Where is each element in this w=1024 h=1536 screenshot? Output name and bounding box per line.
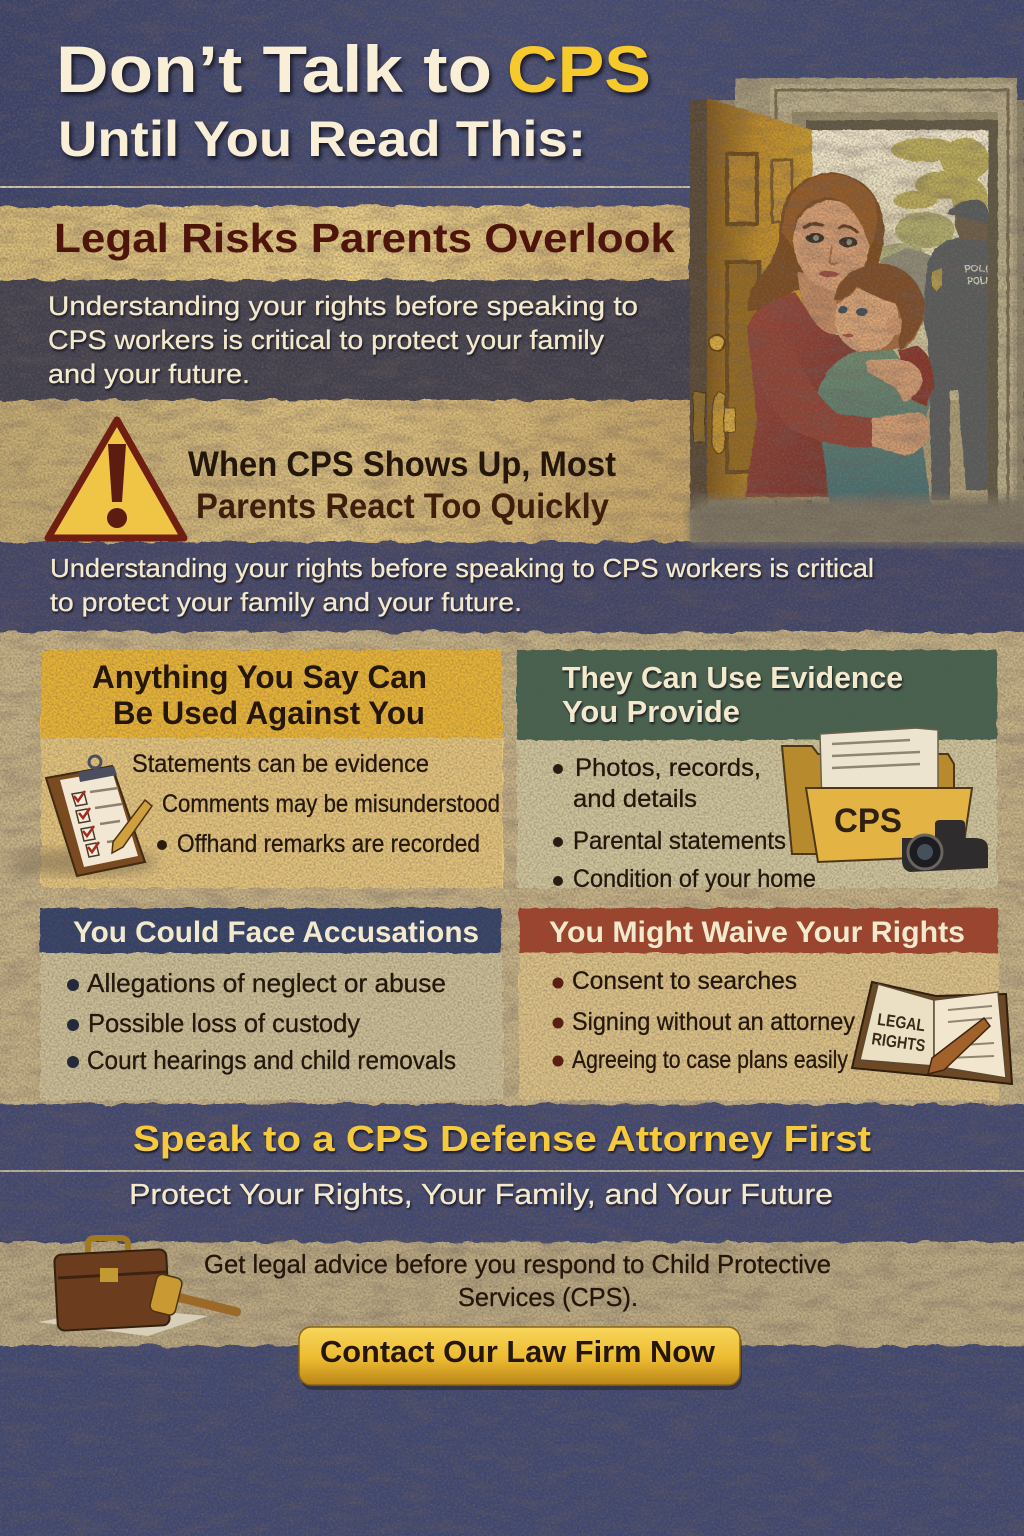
panel bullets: Signing without an attorney	[572, 1008, 855, 1036]
call to action text: Services (CPS).	[458, 1282, 638, 1312]
title: Don’t Talk to	[56, 32, 492, 106]
view outside the door	[812, 130, 989, 505]
call to action text	[204, 1249, 831, 1312]
icon: clipboard with checklist	[13, 756, 157, 876]
panel heading: You Provide	[562, 694, 740, 729]
panel heading	[562, 660, 903, 729]
panel bullets: Agreeing to case plans easily	[572, 1046, 848, 1074]
panel: waive rights	[519, 908, 1012, 1100]
icon: CPS folder and camera: CPS	[834, 802, 902, 840]
panel bullets: Photos, records,	[575, 754, 761, 782]
panel heading: They Can Use Evidence	[562, 660, 903, 695]
heading: when CPS shows up	[188, 445, 616, 526]
icon: legal rights book and pen: LEGAL	[876, 1010, 926, 1035]
panel bullets: Consent to searches	[572, 967, 797, 995]
button: contact	[299, 1327, 742, 1390]
icon: legal rights book and pen: RIGHTS	[870, 1029, 927, 1056]
second paragraph: Understanding your rights before speaking to CPS workers is critical	[50, 553, 874, 583]
panel bullets	[67, 968, 456, 1075]
panel bullets: Parental statements	[573, 827, 786, 855]
police officer: POLI	[967, 276, 988, 287]
floor	[690, 498, 1024, 544]
panel: evidence you provide	[517, 650, 997, 893]
door frame	[690, 78, 1024, 542]
intro paragraph: Understanding your rights before speaking to	[48, 291, 638, 321]
mother's arms hugging	[747, 328, 934, 456]
call to action text: Get legal advice before you respond to Child Protective	[204, 1249, 831, 1279]
footer subheading: Protect Your Rights, Your Family, and Your Future	[129, 1179, 833, 1211]
panel bullets: Condition of your home	[573, 865, 816, 893]
second paragraph: to protect your family and your future.	[50, 587, 522, 617]
icon: briefcase and gavel	[38, 1238, 245, 1336]
title: Until You Read This:	[58, 111, 586, 167]
panel bullets: Court hearings and child removals	[87, 1045, 456, 1075]
police officer	[922, 200, 988, 500]
mother	[745, 172, 884, 497]
heading: when CPS shows up: Parents React Too Quickly	[196, 487, 609, 526]
panel bullets: Allegations of neglect or abuse	[87, 968, 446, 998]
illustration: mother and son at the door with officer	[690, 78, 1024, 544]
button: contact: Contact Our Law Firm Now	[320, 1334, 716, 1369]
panel: accusations	[40, 908, 503, 1100]
panel bullets	[132, 750, 500, 858]
title	[56, 32, 651, 167]
panel bullets	[553, 754, 816, 893]
panel bullets: Possible loss of custody	[88, 1008, 360, 1038]
panel heading	[92, 659, 427, 731]
panel bullets: Comments may be misunderstood	[162, 790, 500, 818]
footer heading: Speak to a CPS Defense Attorney First	[133, 1118, 871, 1159]
panel heading: You Could Face Accusations	[73, 916, 479, 949]
second paragraph	[50, 553, 874, 617]
intro paragraph	[48, 291, 638, 389]
police officer: POLI	[964, 264, 988, 275]
intro paragraph: and your future.	[48, 359, 250, 389]
icon: warning triangle	[48, 420, 184, 538]
panel heading: Be Used Against You	[113, 695, 425, 731]
title: CPS	[507, 32, 651, 106]
panel heading: You Might Waive Your Rights	[549, 916, 965, 949]
icon: CPS folder and camera	[782, 728, 988, 872]
panel bullets: Offhand remarks are recorded	[177, 830, 480, 858]
panel bullets: Statements can be evidence	[132, 750, 429, 778]
intro paragraph: CPS workers is critical to protect your family	[48, 325, 605, 355]
heading: when CPS shows up: When CPS Shows Up, Most	[188, 445, 616, 484]
icon: legal rights book and pen	[852, 982, 1012, 1084]
boy	[815, 263, 932, 512]
panel bullets: and details	[573, 785, 697, 813]
heading: legal risks: Legal Risks Parents Overlook	[54, 215, 675, 261]
open wooden door	[690, 98, 812, 510]
panel heading: Anything You Say Can	[92, 659, 427, 695]
panel bullets	[552, 967, 855, 1074]
panel: anything you say	[13, 650, 503, 888]
